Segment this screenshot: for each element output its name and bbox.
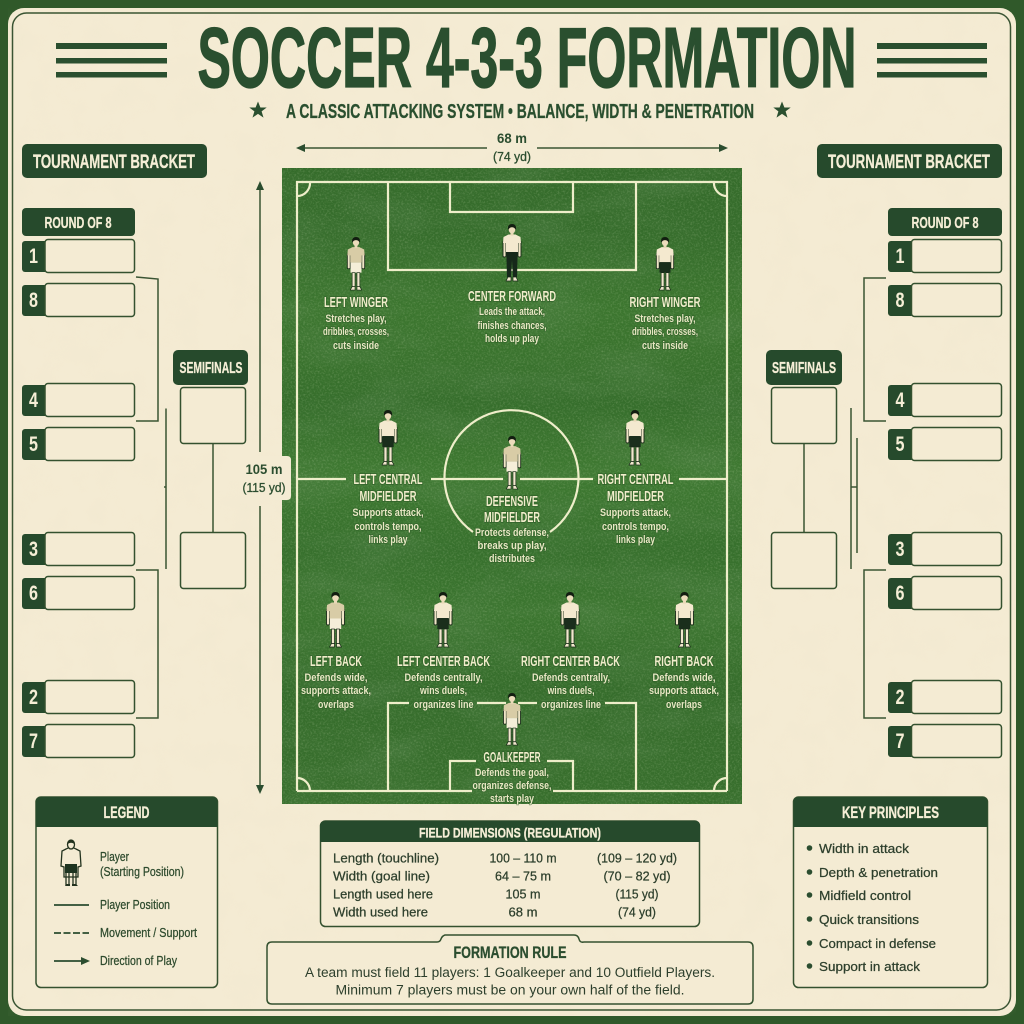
player: goalkeeper: GOALKEEPER [484,749,541,766]
seed 6: 6 [896,582,904,605]
player: right back [649,592,719,711]
player: goalkeeper: organizes defense, [472,780,552,792]
row: length used: Length used here [333,886,433,902]
principle: compact: Compact in defense [819,936,936,951]
player: right central midfielder: controls tempo, [602,521,669,533]
seed 4 [22,384,134,416]
pitch lines [297,182,727,791]
player: right back: Defends wide, [652,672,716,684]
seed 8 [22,284,134,316]
panel: key principles [794,797,988,988]
seed 7: 7 [29,730,38,753]
player: right winger: Stretches play, [634,313,696,325]
player: left center back [397,592,490,711]
player: left central midfielder: MIDFIELDER [360,488,417,505]
panel: formation rule [267,935,753,1004]
player: right center back: RIGHT CENTER BACK [521,653,620,670]
player: left back: LEFT BACK [310,653,362,670]
legend: direction arrow [54,953,177,968]
seed 1 [888,240,1002,272]
player: right winger [630,237,701,352]
player: left winger: dribbles, crosses, [323,326,389,338]
seed 3: 3 [896,538,904,561]
legend: player position line: Player Position [100,897,170,912]
seed 7: 7 [896,730,904,753]
seed 5 [22,428,134,460]
seed 2: 2 [896,686,904,709]
player: center forward: holds up play [485,333,540,345]
player: right winger: RIGHT WINGER [630,294,701,311]
panel: field dimensions [320,821,700,926]
player: left winger [323,237,389,352]
right bracket connectors [804,278,886,718]
seed 2 [22,680,134,714]
panel: formation rule: FORMATION RULE [454,943,566,962]
length dimension arrow [242,181,291,794]
player: right central midfielder: Supports attack, [600,507,671,519]
row: length used: (115 yd) [616,886,658,902]
player: left center back: organizes line [414,699,474,711]
row: width goal line [333,868,670,884]
principle: width: Width in attack [819,841,910,856]
legend: player label: (Starting Position) [100,864,184,879]
row: width used: (74 yd) [618,904,656,920]
icon: player [61,840,81,886]
seed 8: 8 [896,289,905,312]
player: defensive midfielder: breaks up play, [478,540,546,552]
principle: depth: Depth & penetration [819,865,938,880]
player: right center back [521,592,620,711]
soccer field [282,168,742,805]
player: left back [301,592,371,711]
player: left center back: wins duels, [419,685,467,697]
player: right central midfielder [598,410,674,546]
player: left central midfielder: controls tempo, [354,521,422,533]
principle: transitions: Quick transitions [819,912,920,927]
row: length used: 105 m [506,886,540,902]
title bars right [877,43,987,78]
seed 8: 8 [29,289,38,312]
player: left central midfielder [352,410,424,546]
player: right central midfielder: links play [616,534,656,546]
length dimension arrow: 105 m [246,461,282,477]
player: center forward [468,224,556,345]
player: goalkeeper: Defends the goal, [475,767,549,779]
row: width goal line: 64 – 75 m [495,868,551,884]
seed 6 [22,576,134,610]
panel: formation rule: A team must field 11 players: 1 Goalkeeper and 10 Outfield Players. [305,965,715,980]
left bracket connectors [136,277,213,718]
player: left back: supports attack, [301,685,371,697]
player: left central midfielder: Supports attack, [352,507,424,519]
width dimension arrow: (74 yd) [493,149,531,164]
right round of 8: ROUND OF 8 [912,215,979,232]
seed 3 [22,532,134,566]
seed 8 [888,284,1002,316]
title bars left [56,43,167,78]
seed 1: 1 [29,245,38,268]
row: length used [333,886,658,902]
player: left winger: cuts inside [333,340,379,352]
panel: legend: LEGEND [104,804,150,822]
player: center forward: Leads the attack, [479,306,545,318]
principle: midfield: Midfield control [819,888,911,903]
panel: legend [36,797,218,988]
seed 5: 5 [29,433,38,456]
seed 1 [22,240,134,272]
player: right center back: Defends centrally, [532,672,610,684]
seed 7 [888,724,1002,758]
player: right center back: organizes line [541,699,601,711]
legend: player position line [54,897,170,912]
player: right central midfielder: RIGHT CENTRAL [598,471,674,488]
player: goalkeeper [472,693,552,805]
panel: key principles: KEY PRINCIPLES [842,804,939,822]
row: width used: 68 m [508,904,538,920]
length dimension arrow: (115 yd) [242,480,286,495]
right semifinals: SEMIFINALS [772,360,836,377]
principle: support: Support in attack [819,959,921,974]
grass stripes [282,168,742,804]
seed 2 [888,680,1002,714]
player: goalkeeper: starts play [490,793,535,805]
row: length touchline: Length (touchline) [333,850,439,866]
player: left winger: Stretches play, [326,313,386,325]
player: defensive midfielder: Protects defense, [475,527,549,539]
row: width goal line: (70 – 82 yd) [604,868,670,884]
width dimension arrow [296,130,728,164]
player: left center back: LEFT CENTER BACK [397,653,490,670]
left round of 8 [22,208,135,758]
player: right winger: dribbles, crosses, [632,326,698,338]
row: length touchline: (109 – 120 yd) [597,850,677,866]
seed 6: 6 [29,582,38,605]
player: defensive midfielder: DEFENSIVE [486,493,538,510]
seed 4: 4 [29,389,38,412]
legend: player label [100,849,184,879]
player: left back: overlaps [318,699,354,711]
player: left center back: Defends centrally, [404,672,482,684]
seed 4: 4 [896,389,905,412]
right tournament bracket heading [817,144,1002,178]
seed 7 [22,724,134,758]
player: right back: overlaps [666,699,702,711]
player: right central midfielder: MIDFIELDER [607,488,664,505]
row: width used: Width used here [333,904,428,920]
left tournament bracket heading [22,144,207,178]
left round of 8: ROUND OF 8 [44,215,112,232]
player: defensive midfielder [475,436,549,565]
seed 1: 1 [896,245,905,268]
left tournament bracket heading: TOURNAMENT BRACKET [33,152,195,173]
row: length touchline: 100 – 110 m [490,850,556,866]
seed 3: 3 [29,538,38,561]
player: right back: RIGHT BACK [654,653,714,670]
player: center forward: CENTER FORWARD [468,288,556,305]
legend: direction arrow: Direction of Play [100,953,177,968]
player: center forward: finishes chances, [478,320,546,332]
width dimension arrow: 68 m [497,130,527,146]
player: defensive midfielder: MIDFIELDER [484,509,540,526]
legend: player label: Player [100,849,130,864]
subtitle: A CLASSIC ATTACKING SYSTEM • BALANCE, WIDTH & PENETRATION [286,101,754,123]
player: left central midfielder: LEFT CENTRAL [354,471,422,488]
right semifinals [766,350,842,588]
player: left back: Defends wide, [304,672,368,684]
seed 4 [888,384,1002,416]
seed 6 [888,576,1002,610]
legend: movement dashed line: Movement / Support [100,925,197,940]
row: length touchline [333,850,677,866]
seed 3 [888,532,1002,566]
seed 2: 2 [29,686,38,709]
player: right back: supports attack, [649,685,719,697]
player: right winger: cuts inside [642,340,688,352]
seed 5: 5 [896,433,905,456]
right round of 8 [888,208,1002,758]
player: left winger: LEFT WINGER [324,294,388,311]
player: defensive midfielder: distributes [489,553,535,565]
panel: field dimensions: FIELD DIMENSIONS (REGULATION) [419,826,601,840]
panel: formation rule: Minimum 7 players must be on your own half of the field. [336,982,684,998]
seed 5 [888,428,1002,460]
row: width used [333,904,656,920]
player: left central midfielder: links play [368,534,408,546]
left semifinals: SEMIFINALS [180,360,242,377]
player: right center back: wins duels, [547,685,594,697]
left semifinals [173,350,248,588]
row: width goal line: Width (goal line) [333,868,430,884]
